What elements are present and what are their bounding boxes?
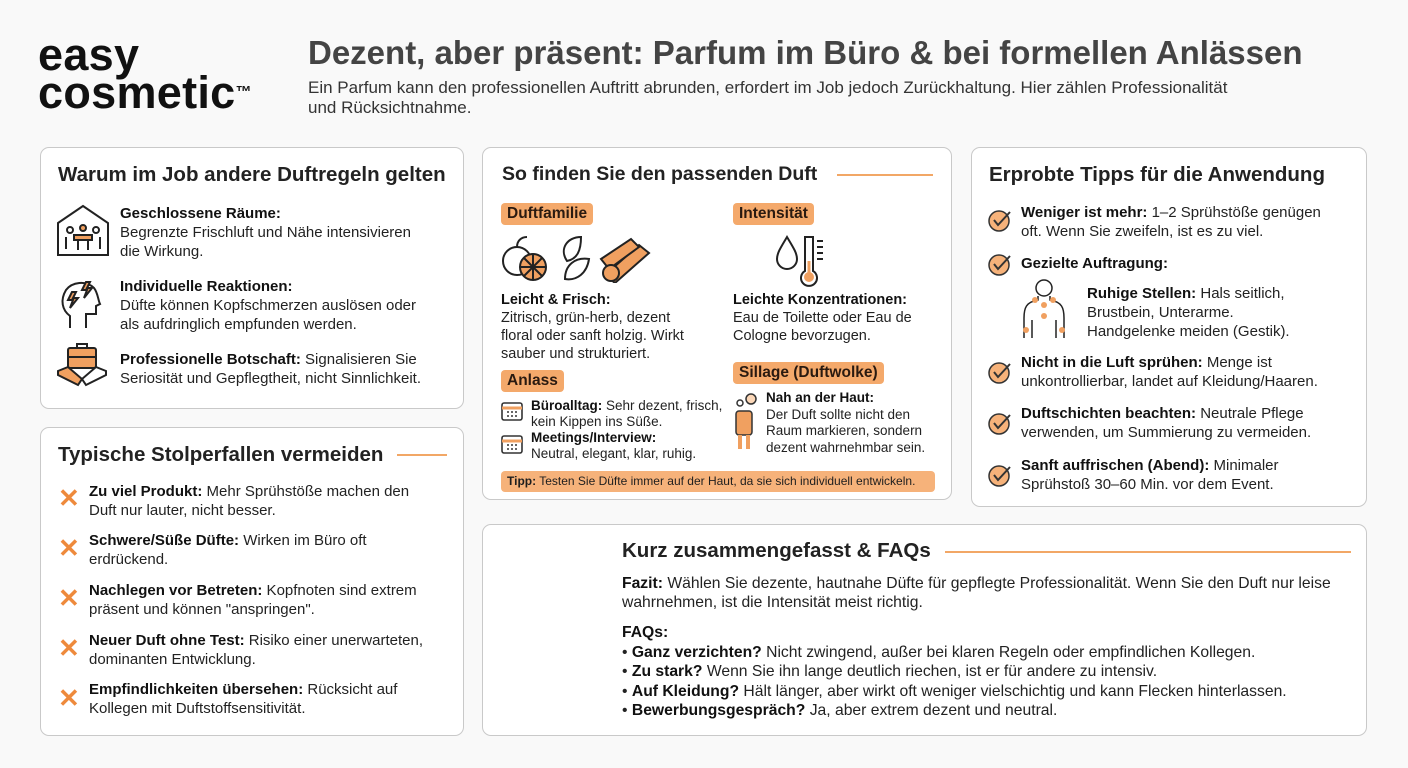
text: message: Professionelle Botschaft: Signalisieren Sie: [120, 351, 417, 368]
logo: [38, 29, 252, 118]
tag: Anlass: [501, 370, 564, 392]
tag: Sillage: Sillage (Duftwolke): [739, 364, 878, 381]
callout: tip: [501, 471, 935, 492]
icon: meeting room: [57, 204, 109, 256]
list: pitfalls: Neuer Duft ohne Test: Risiko einer unerwarteten,: [89, 632, 423, 649]
text: concentrations: Cologne bevorzugen.: [733, 328, 871, 344]
subtitle: [308, 78, 1228, 117]
list: pitfalls: ✕: [58, 533, 80, 563]
list: FAQs: FAQs:: [622, 624, 668, 641]
panel: pitfalls: [40, 427, 464, 736]
list: pitfalls: ✕: [58, 683, 80, 713]
list: tips: Gezielte Auftragung:: [1021, 255, 1168, 272]
panel: finding the right scent: [482, 147, 952, 500]
text: concentrations: [733, 292, 912, 344]
heading: Warum im Job andere Duftregeln gelten: [58, 163, 446, 186]
icon: briefcase handshake: [57, 343, 107, 386]
list: pitfalls: Zu viel Produkt: Mehr Sprühstöße machen den: [89, 483, 409, 500]
text: closed rooms: [120, 205, 411, 260]
list: pitfalls: Nachlegen vor Betreten: Kopfnoten sind extrem: [89, 582, 417, 599]
text: near the skin: Der Duft sollte nicht den: [766, 406, 910, 422]
list: tips: Duftschichten beachten: Neutrale Pflege: [1021, 405, 1304, 422]
text: conclusion: Fazit: Wählen Sie dezente, hautnahe Düfte für gepflegte Professionalität. Wenn Sie den Duft nur leise: [622, 575, 1331, 592]
text: reactions: Individuelle Reaktionen:: [120, 278, 293, 295]
list: pitfalls: erdrückend.: [89, 551, 168, 568]
tag: Anlass: Anlass: [507, 372, 558, 389]
list: FAQs: • Bewerbungsgespräch? Ja, aber extrem dezent und neutral.: [622, 702, 1057, 719]
list: occasions: Meetings/Interview:: [531, 430, 656, 445]
text: reactions: [120, 278, 416, 333]
list: tips: Weniger ist mehr: 1–2 Sprühstöße genügen: [1021, 204, 1321, 221]
list: tips: verwenden, um Summierung zu vermeiden.: [1021, 424, 1311, 441]
subtitle: Ein Parfum kann den professionellen Auftritt abrunden, erfordert im Job jedoch Zurückhaltung. Hier zählen Professionalität: [308, 78, 1227, 97]
list: tips: Nicht in die Luft sprühen: Menge ist: [1021, 354, 1272, 371]
text: light & fresh: Leicht & Frisch:: [501, 292, 611, 308]
list: pitfalls: [58, 483, 423, 717]
tag: Intensität: Intensität: [739, 205, 808, 222]
text: near the skin: dezent wahrnehmbar sein.: [766, 440, 925, 454]
tag: Duftfamilie: [501, 203, 593, 225]
list: pitfalls: Schwere/Süße Düfte: Wirken im Büro oft: [89, 532, 367, 549]
list: tips: Brustbein, Unterarme.: [1087, 304, 1234, 321]
panel: application tips: [971, 147, 1367, 507]
list: tips: Handgelenke meiden (Gestik).: [1087, 323, 1290, 340]
list: occasions: [501, 398, 722, 461]
list: FAQs: • Zu stark? Wenn Sie ihn lange deutlich riechen, ist er für andere zu intensiv.: [622, 663, 1157, 680]
list: tips: Sanft auffrischen (Abend): Minimaler: [1021, 457, 1279, 474]
text: light & fresh: floral oder sanft holzig. Wirkt: [501, 328, 684, 344]
list: tips: [988, 204, 1321, 493]
heading: Typische Stolperfallen vermeiden: [58, 443, 383, 466]
list: pitfalls: dominanten Entwicklung.: [89, 651, 256, 668]
subtitle: und Rücksichtnahme.: [308, 98, 471, 117]
logo: cosmetic™: [38, 67, 252, 118]
text: reactions: Düfte können Kopfschmerzen auslösen oder: [120, 297, 416, 314]
text: near the skin: [766, 390, 925, 454]
title: Dezent, aber präsent: Parfum im Büro & bei formellen Anlässen: [308, 34, 1303, 71]
list: pitfalls: ✕: [58, 483, 80, 513]
list: occasions: Büroalltag: Sehr dezent, frisch,: [531, 398, 722, 413]
heading: Erprobte Tipps für die Anwendung: [989, 163, 1325, 186]
text: concentrations: Leichte Konzentrationen:: [733, 292, 907, 308]
text: closed rooms: Begrenzte Frischluft und Nähe intensivieren: [120, 224, 411, 241]
list: pitfalls: präsent und können "anspringen".: [89, 601, 315, 618]
icon: drop and thermometer: [776, 235, 823, 287]
text: conclusion: wahrnehmen, ist die Intensität meist richtig.: [622, 594, 923, 611]
text: reactions: als aufdringlich empfunden werden.: [120, 316, 357, 333]
list: pitfalls: Kollegen mit Duftstoffsensitivität.: [89, 700, 306, 717]
text: closed rooms: Geschlossene Räume:: [120, 205, 281, 222]
list: tips: Sprühstoß 30–60 Min. vor dem Event.: [1021, 476, 1274, 493]
heading: So finden Sie den passenden Duft: [502, 163, 817, 185]
list: FAQs: [622, 624, 1287, 719]
list: FAQs: • Ganz verzichten? Nicht zwingend, außer bei klaren Regeln oder empfindlichen Kollegen.: [622, 644, 1255, 661]
list: tips: Ruhige Stellen: Hals seitlich,: [1087, 285, 1285, 302]
icon: person with bubble: [735, 393, 757, 449]
text: message: [120, 351, 421, 387]
list: pitfalls: ✕: [58, 633, 80, 663]
text: near the skin: Raum markieren, sondern: [766, 423, 922, 438]
list: tips: oft. Wenn Sie zweifeln, ist es zu viel.: [1021, 223, 1263, 240]
callout: tip: Tipp: Testen Sie Düfte immer auf der Haut, da sie sich individuell entwickeln.: [507, 474, 915, 488]
icons: citrus, leaves, wood: [502, 236, 650, 283]
list: occasions: kein Kippen ins Süße.: [531, 414, 662, 429]
text: light & fresh: [501, 292, 684, 362]
text: closed rooms: die Wirkung.: [120, 243, 203, 260]
logo: easy: [38, 29, 139, 80]
text: message: Seriosität und Gepflegtheit, nicht Sinnlichkeit.: [120, 370, 421, 387]
text: light & fresh: sauber und strukturiert.: [501, 346, 650, 362]
list: pitfalls: Duft nur lauter, nicht besser.: [89, 502, 276, 519]
heading: Kurz zusammengefasst & FAQs: [622, 539, 931, 562]
list: tips: unkontrollierbar, landet auf Kleidung/Haaren.: [1021, 373, 1318, 390]
list: pitfalls: ✕: [58, 583, 80, 613]
icon: headache: [62, 281, 102, 328]
panel: why job rules differ: [40, 147, 464, 409]
list: occasions: Neutral, elegant, klar, ruhig.: [531, 446, 696, 461]
text: light & fresh: Zitrisch, grün-herb, dezent: [501, 310, 670, 326]
text: near the skin: Nah an der Haut:: [766, 390, 874, 405]
text: concentrations: Eau de Toilette oder Eau de: [733, 310, 912, 326]
list: pitfalls: Empfindlichkeiten übersehen: Rücksicht auf: [89, 681, 397, 698]
tag: Intensität: [733, 203, 814, 225]
tag: Duftfamilie: Duftfamilie: [507, 205, 587, 222]
text: conclusion: [622, 575, 1331, 611]
panel: summary & FAQs: [482, 524, 1367, 736]
list: FAQs: • Auf Kleidung? Hält länger, aber wirkt oft weniger vielschichtig und kann Flecken hinterlassen.: [622, 683, 1287, 700]
